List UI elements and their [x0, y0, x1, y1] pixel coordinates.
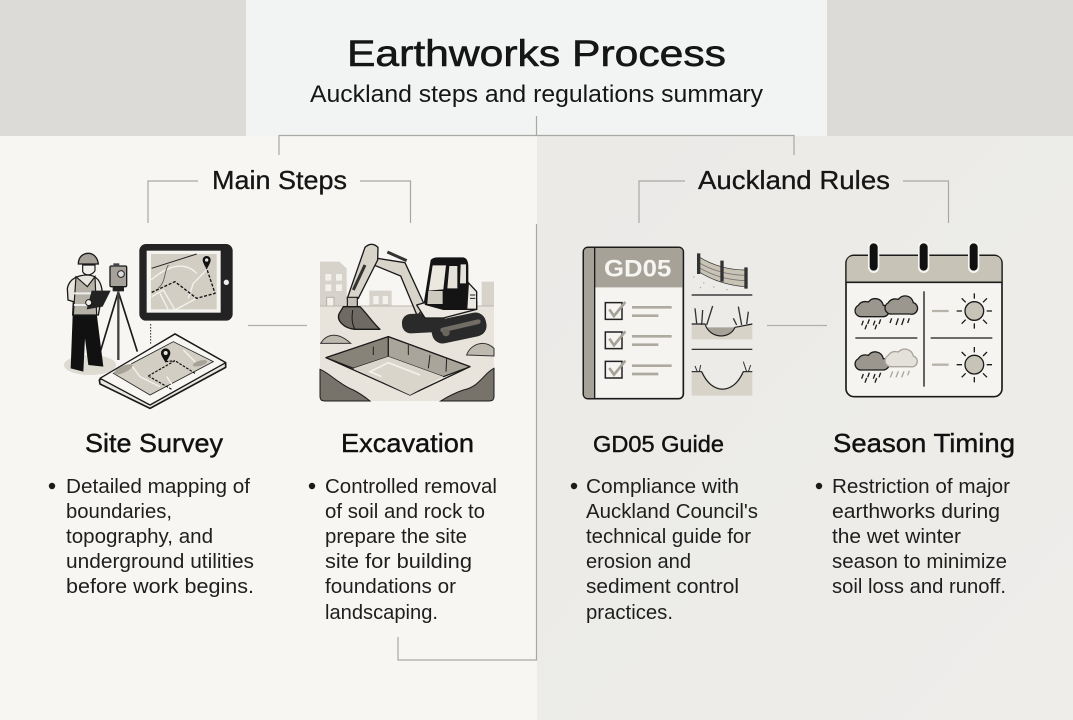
- text: gd05 guide description: erosion and: [586, 550, 691, 573]
- text: excavation description: of soil and rock to: [325, 500, 485, 523]
- heading: auckland rules: Auckland Rules: [698, 165, 890, 195]
- text: excavation description: site for building: [325, 550, 472, 573]
- text: excavation description: foundations or: [325, 575, 456, 598]
- text: season timing description: soil loss and runoff.: [832, 575, 1006, 598]
- excavator bucket: [339, 307, 380, 329]
- text: site survey description: [66, 475, 254, 598]
- text: excavation description: Controlled removal: [325, 475, 497, 498]
- text: season timing description: [832, 475, 1010, 598]
- subtitle: Auckland steps and regulations summary: [310, 81, 763, 108]
- text: gd05 guide description: Compliance with: [586, 475, 739, 498]
- icon: excavation: [320, 244, 494, 401]
- block: excavation: [309, 428, 497, 624]
- panel: auckland rules background: [537, 136, 1073, 720]
- text: site survey description: Detailed mapping of: [66, 475, 250, 498]
- panel: main steps background: [0, 136, 537, 720]
- heading: gd05 guide: GD05 Guide: [593, 431, 724, 457]
- excavator boom: [375, 258, 425, 316]
- text: site survey description: before work begins.: [66, 575, 254, 598]
- connector: auckland rules bracket: [639, 181, 948, 223]
- heading: main steps: Main Steps: [212, 165, 347, 195]
- connector: main steps bracket: [148, 181, 410, 223]
- text: site survey description: topography, and: [66, 525, 213, 548]
- text: season timing description: the wet winter: [832, 525, 961, 548]
- text: excavation description: prepare the site: [325, 525, 467, 548]
- bullet: excavation: [309, 483, 315, 489]
- bullet: season timing: [816, 483, 822, 489]
- label: GD05: GD05: [604, 256, 671, 283]
- icon: season timing calendar: [846, 247, 1002, 397]
- heading: site survey: Site Survey: [85, 428, 223, 458]
- title: Earthworks Process: [347, 33, 726, 74]
- connector: centre line to bottom: [398, 224, 536, 660]
- text: site survey description: underground utilities: [66, 550, 254, 573]
- checklist: [605, 302, 672, 378]
- text: site survey description: boundaries,: [66, 500, 172, 523]
- excavator arm: [347, 244, 378, 298]
- connector: guide to season: [767, 324, 827, 326]
- icon: site survey: [64, 244, 233, 408]
- text: gd05 guide description: sediment control: [586, 575, 739, 598]
- icon: gd05 guide and erosion controls: [583, 247, 752, 399]
- heading: season timing: Season Timing: [833, 428, 1015, 458]
- text: excavation description: landscaping.: [325, 601, 438, 624]
- text: excavation description: [325, 475, 497, 624]
- block: site survey: [49, 428, 254, 598]
- text: season timing description: earthworks during: [832, 500, 1000, 523]
- text: gd05 guide description: technical guide for: [586, 525, 751, 548]
- text: season timing description: Restriction of major: [832, 475, 1010, 498]
- bullet: gd05 guide: [571, 483, 577, 489]
- block: gd05 guide: [571, 431, 758, 624]
- excavator tracks: [402, 311, 489, 345]
- text: gd05 guide description: [586, 475, 758, 624]
- panel: header side bands: [0, 0, 1073, 136]
- bullet: site survey: [49, 483, 55, 489]
- text: gd05 guide description: practices.: [586, 601, 673, 624]
- excavator cab body: [417, 257, 477, 318]
- connector: header to sections: [279, 116, 794, 155]
- text: gd05 guide description: Auckland Council's: [586, 500, 758, 523]
- text: season timing description: season to minimize: [832, 550, 1007, 573]
- block: season timing: [816, 428, 1015, 598]
- panel: header: [246, 0, 827, 136]
- connector: survey to excavation: [248, 324, 307, 326]
- heading: excavation: Excavation: [341, 428, 474, 458]
